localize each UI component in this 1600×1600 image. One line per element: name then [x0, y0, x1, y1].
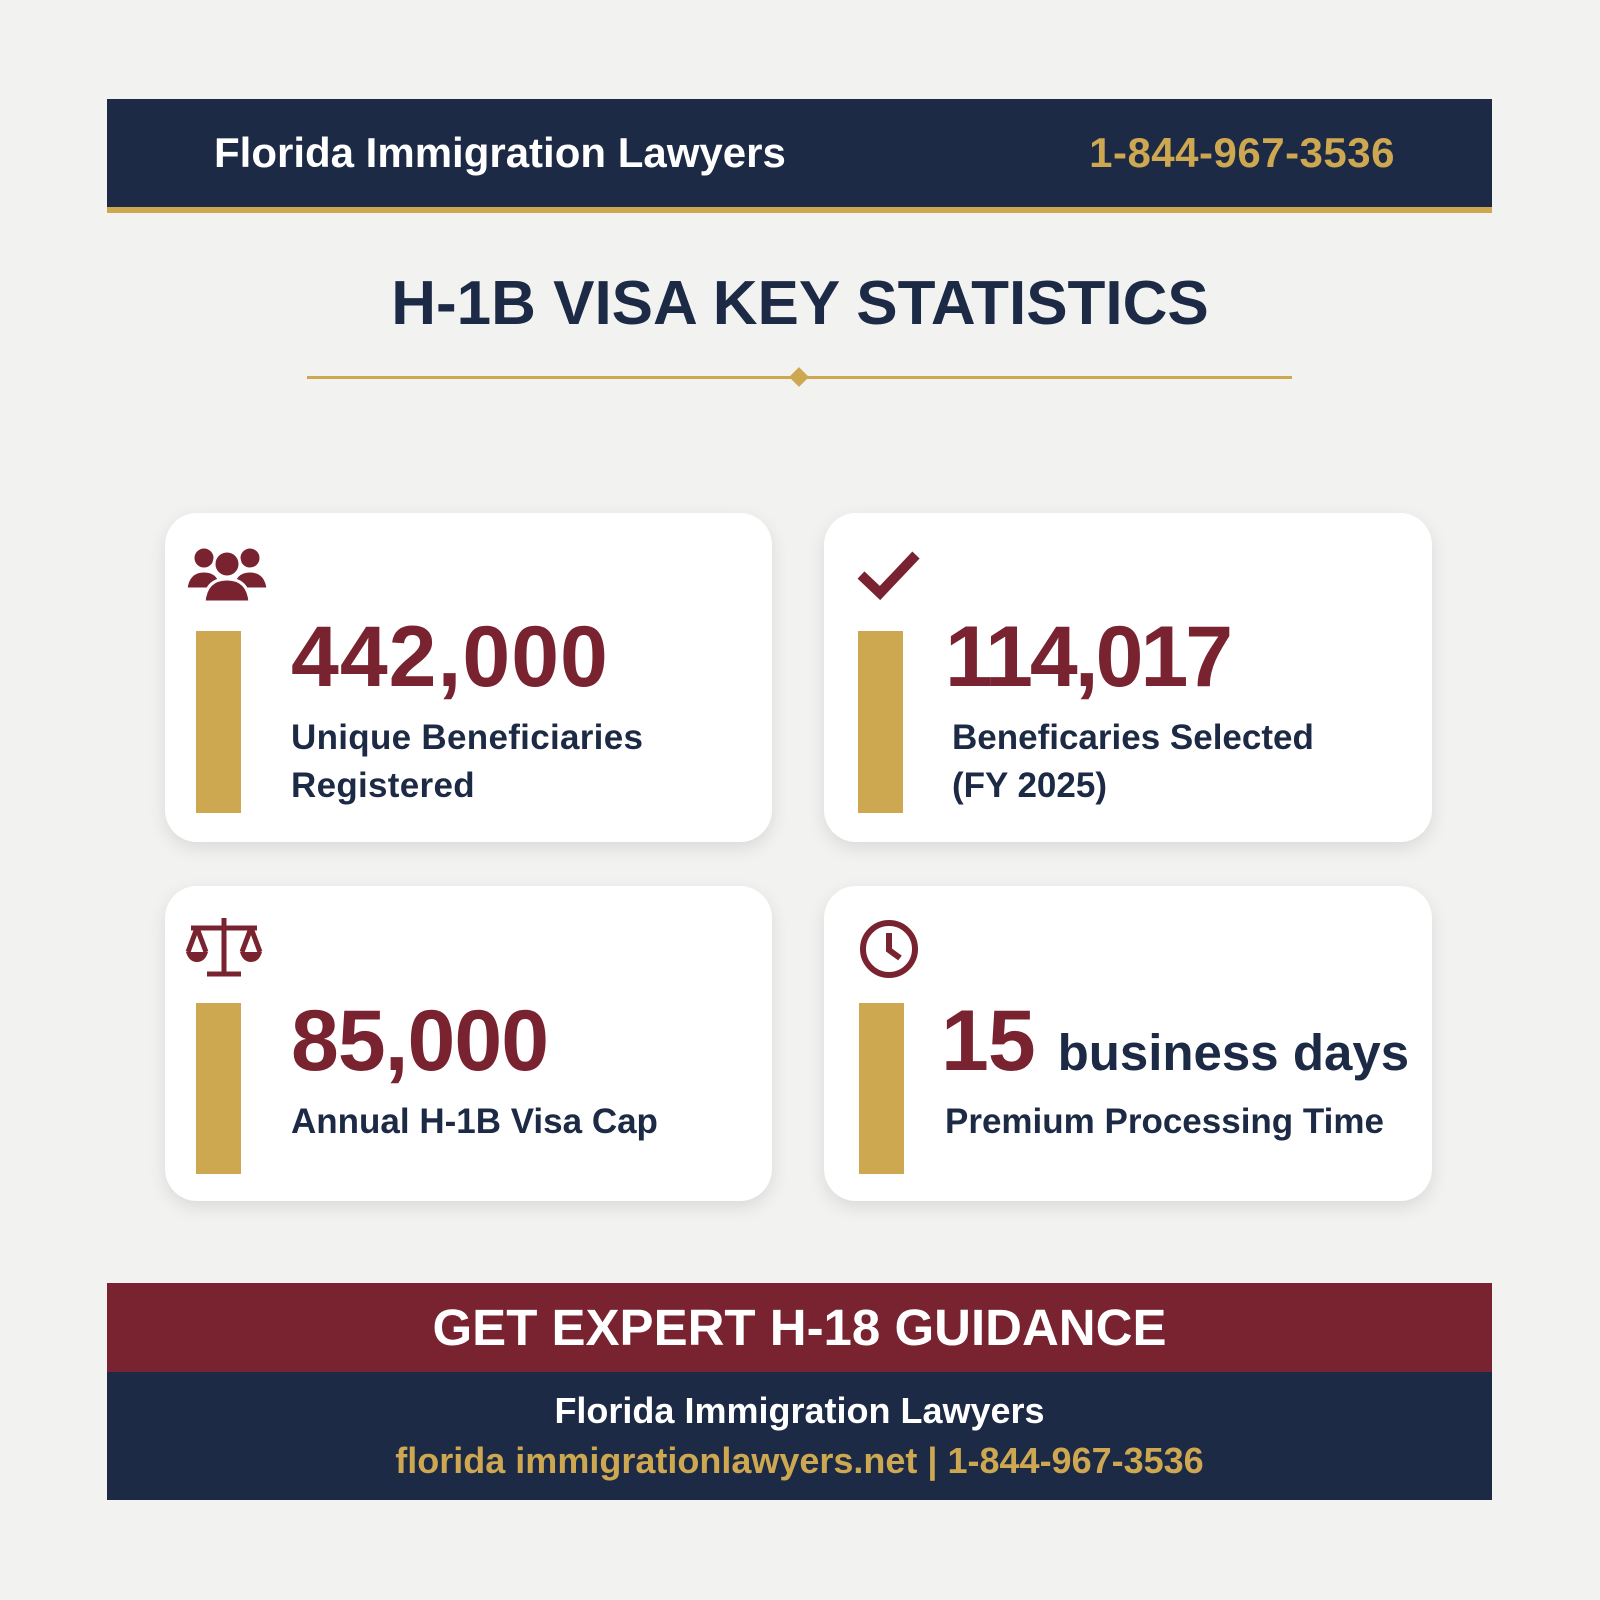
header firm name: Florida Immigration Lawyers: [214, 129, 786, 176]
CTA red band: GET EXPERT H-18 GUIDANCE: [433, 1299, 1166, 1356]
title divider: [307, 376, 1292, 379]
card: processing: [824, 886, 1432, 1201]
label: Annual H-1B Visa Cap: [291, 1102, 658, 1141]
label: Beneficaries Selected: [952, 718, 1314, 757]
header bar: [107, 99, 1492, 213]
card: selected: [824, 513, 1432, 842]
footer firm name: Florida Immigration Lawyers: [554, 1390, 1045, 1431]
footer contact: florida immigrationlawyers.net | 1-844-967-3536: [395, 1440, 1204, 1481]
header phone: 1-844-967-3536: [1089, 129, 1395, 176]
card: registered: [165, 513, 772, 842]
number: 442,000: [291, 609, 609, 705]
icon: check: [858, 552, 920, 600]
CTA red band: [107, 1283, 1492, 1372]
label: [291, 718, 643, 805]
number: 85,000: [291, 993, 548, 1089]
icon: clock: [860, 920, 918, 978]
icon: scales: [186, 918, 262, 976]
label: Unique Beneficiaries: [291, 718, 643, 757]
number: 15 business days: [941, 993, 1409, 1089]
footer navy band: [107, 1372, 1492, 1500]
card: cap: [165, 886, 772, 1201]
icon: people: [188, 548, 266, 600]
label: Premium Processing Time: [945, 1102, 1384, 1141]
number: 114,017: [945, 609, 1230, 705]
label: [952, 718, 1314, 805]
title: H-1B VISA KEY STATISTICS: [391, 269, 1209, 338]
label: Registered: [291, 766, 475, 805]
label: (FY 2025): [952, 766, 1107, 805]
